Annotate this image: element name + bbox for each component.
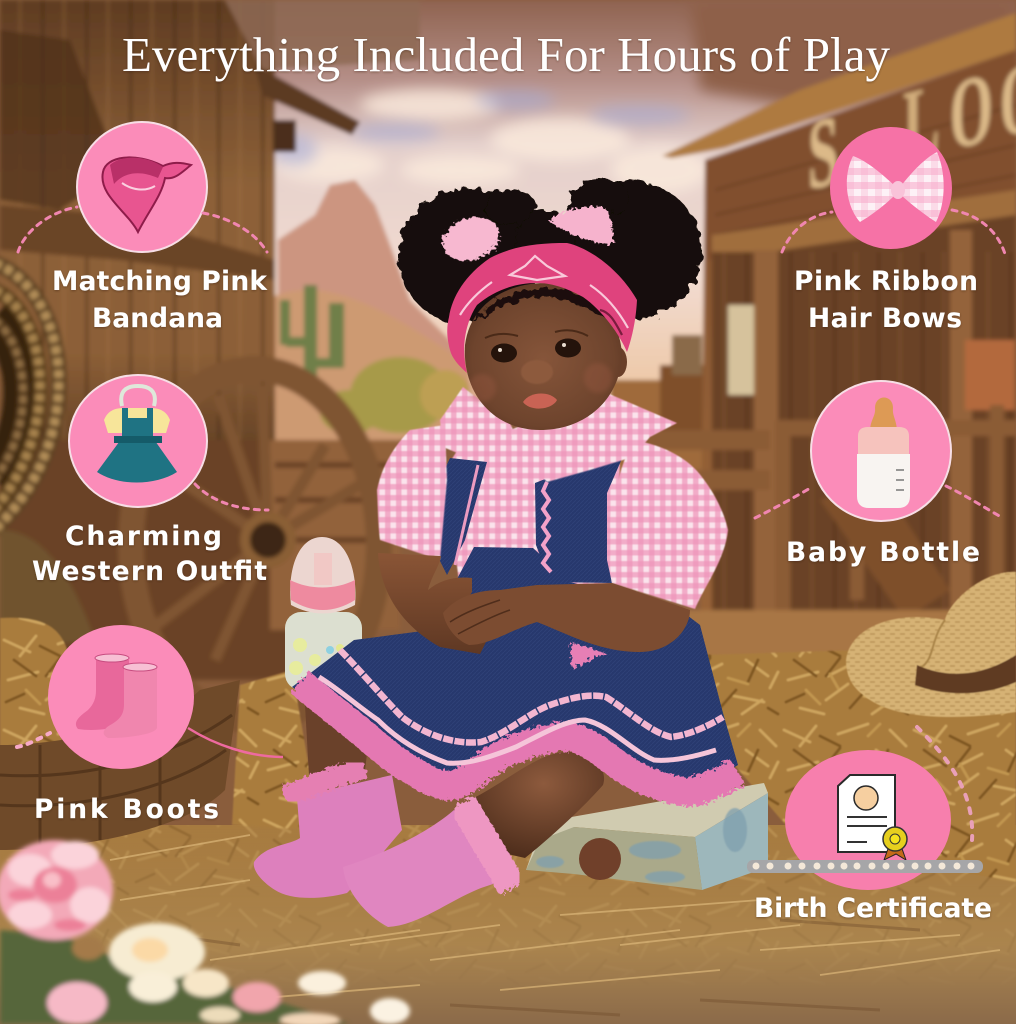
icon badge: western outfit — [69, 375, 207, 507]
boots icon — [76, 654, 157, 738]
lower pale lace trim — [319, 677, 716, 763]
lips — [523, 393, 557, 409]
saguaro cactus — [280, 285, 344, 395]
left hay heap — [0, 618, 72, 750]
connector: bottle — [755, 486, 1003, 518]
left roof haze — [225, 0, 420, 70]
basket weave — [0, 715, 232, 845]
label: pink ribbon hair bows — [794, 266, 978, 334]
desert shrubs — [320, 357, 470, 434]
right pink hair pom — [549, 207, 613, 245]
cheeks — [468, 363, 612, 402]
left pink hair pom — [437, 210, 505, 268]
bottle icon — [857, 398, 910, 508]
right leg — [470, 752, 604, 858]
left barn lower wall — [0, 440, 300, 680]
connector: boots — [188, 728, 283, 757]
left roof edge — [255, 65, 360, 135]
title: Everything Included For Hours of Play — [122, 27, 890, 82]
doll head — [465, 283, 622, 430]
left barn wall — [0, 0, 275, 470]
suitcase side — [695, 793, 768, 890]
left boot fluff — [285, 767, 365, 797]
left roof bracket — [273, 120, 296, 152]
hay bale right — [700, 650, 1016, 882]
saloon building — [700, 50, 1016, 640]
outfit icon — [97, 386, 177, 482]
saloon shadowed porch — [712, 215, 1016, 640]
big gingham collar left — [440, 387, 514, 457]
saloon porch beam — [712, 190, 1016, 252]
sky blue patches — [273, 90, 690, 166]
connector: bow — [782, 210, 1005, 254]
saloon posts and window — [754, 230, 972, 620]
floor straw — [110, 835, 1000, 1000]
icon badge: pink boots — [48, 625, 194, 769]
saloon sign letters: O — [950, 51, 993, 172]
saloon roof — [662, 13, 1016, 158]
connector: outfit — [195, 484, 268, 510]
left boot — [254, 775, 402, 898]
right top haze — [690, 0, 1016, 110]
finger lines — [450, 600, 510, 634]
bandana headband — [447, 243, 637, 373]
connector: bandana — [18, 207, 267, 252]
left vest trim — [455, 465, 478, 565]
desert hills — [270, 290, 470, 440]
shirt body — [445, 430, 620, 590]
label: matching pink bandana — [52, 266, 268, 334]
curly fringe — [470, 288, 618, 328]
icon badge: matching pink bandana — [77, 122, 207, 252]
left barn dark recess — [0, 30, 120, 210]
label: charming western outfit — [32, 521, 267, 587]
certificate paper — [838, 775, 895, 852]
doll hair puffs — [398, 179, 702, 325]
wagon wheel — [131, 369, 379, 721]
doll figure — [254, 179, 768, 927]
bandana icon — [102, 157, 191, 232]
icon badge: birth certificate — [785, 750, 951, 890]
dotted grey bar — [747, 860, 983, 873]
certificate lines — [847, 817, 887, 842]
nose — [521, 360, 553, 384]
bandana motif — [460, 256, 628, 335]
label: charming western outfit: Western Outfit — [32, 556, 267, 587]
suitcase knob — [579, 838, 621, 880]
skirt hem fringe — [300, 682, 738, 792]
right forearm and hand — [443, 583, 690, 652]
suitcase blue patches — [536, 808, 747, 883]
floor straw layer — [96, 825, 1016, 941]
saloon sign letters — [808, 39, 1024, 212]
right boot — [343, 810, 505, 927]
label: pink ribbon hair bows: Hair Bows — [808, 303, 962, 334]
ribbon seal — [883, 827, 907, 860]
saloon sign letters: S — [808, 94, 839, 212]
left basket — [0, 680, 240, 850]
upper pink lace trim — [340, 650, 723, 743]
pink skirt tassel — [570, 642, 606, 668]
far left leg — [305, 705, 370, 775]
straw cowboy hat — [846, 572, 1016, 717]
label: matching pink bandana: Matching Pink — [52, 266, 268, 297]
white right margin — [1016, 0, 1024, 1024]
rope coil — [0, 263, 59, 530]
suitcase front panel — [526, 827, 702, 890]
hay bale left — [232, 670, 320, 830]
label: baby bottle: Baby Bottle — [786, 537, 980, 568]
big gingham collar right — [510, 393, 677, 482]
saloon wall planks — [715, 105, 1016, 235]
baby face — [854, 786, 878, 810]
suitcase top — [526, 783, 768, 870]
dirt behind — [620, 610, 1016, 680]
label: matching pink bandana: Bandana — [92, 303, 223, 334]
connector dotted: boots left — [17, 733, 50, 747]
ric rac trim — [543, 482, 551, 572]
clouds — [275, 89, 710, 194]
floor — [0, 825, 1016, 1024]
sky — [262, 0, 1016, 400]
saloon sign letters: L — [903, 62, 940, 182]
icon badge: baby bottle — [811, 381, 951, 521]
wheel hub — [245, 517, 291, 563]
left arm and hand — [378, 553, 486, 654]
left vest panel — [435, 458, 487, 575]
mountain — [278, 180, 470, 400]
right boot fluff — [462, 803, 512, 888]
right sleeve — [610, 440, 728, 609]
right ear — [609, 347, 627, 377]
far wooden shack — [610, 380, 770, 520]
skirt — [292, 547, 738, 795]
dotted straw connector: certificate — [917, 727, 972, 840]
left barn ledge — [0, 205, 275, 280]
toy bottle beside doll — [285, 537, 362, 690]
fence behind wheel — [270, 440, 400, 630]
bow icon — [847, 152, 944, 222]
icon badge: pink ribbon bows — [830, 127, 952, 249]
eyebrows — [485, 330, 588, 338]
label: pink ribbon hair bows: Pink Ribbon — [794, 266, 978, 297]
label: pink boots: Pink Boots — [34, 794, 219, 825]
right vest panel — [535, 447, 627, 583]
eyes — [491, 338, 581, 362]
fallen planks — [820, 480, 950, 620]
left sleeve — [377, 425, 447, 560]
floor dirt marks — [130, 920, 920, 1015]
fence — [640, 405, 1016, 625]
label: birth certificate: Birth Certificate — [754, 893, 992, 924]
straw bundle under rope — [0, 530, 95, 650]
flowers bottom-left — [0, 840, 410, 1024]
label: charming western outfit: Charming — [65, 521, 222, 552]
